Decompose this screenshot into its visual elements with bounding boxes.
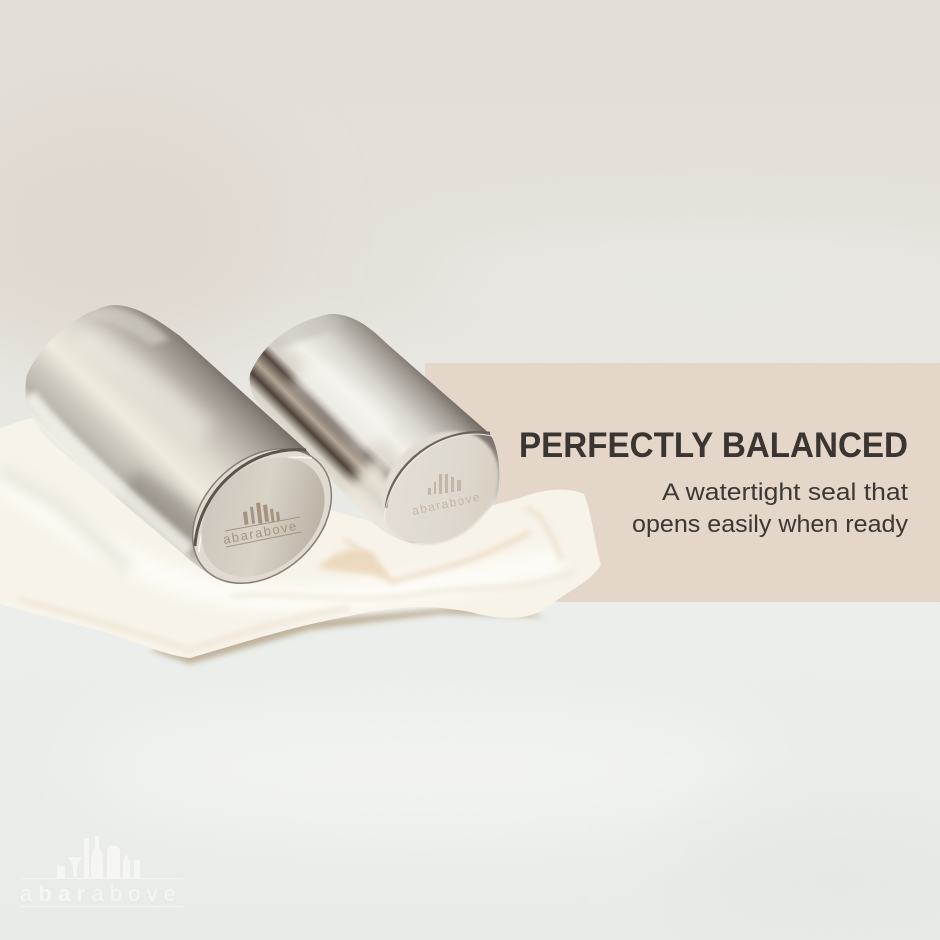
engraved logo: small cup: abarabove: [411, 490, 482, 518]
cloth shadow: [150, 604, 545, 664]
text block: description: opens easily when ready: [632, 511, 908, 538]
icon: small steel cup: [250, 314, 500, 545]
text block: description: A watertight seal that: [662, 479, 908, 506]
engraved logo: large cup: abarabove: [222, 518, 299, 547]
heading: PERFECTLY BALANCED: [519, 426, 908, 465]
icon: brand watermark logo: abarabove: [20, 881, 182, 906]
rim: large cup base: [166, 421, 358, 611]
engraved logo: small cup: [411, 474, 482, 518]
text block: description: [632, 479, 908, 538]
lid: large cup base: [178, 433, 348, 601]
engraved logo: large cup: [222, 503, 301, 547]
icon: brand watermark logo: [20, 836, 183, 907]
lid: small cup base: [359, 408, 521, 568]
cloth: white napkin under cups: [0, 418, 601, 658]
icon: large steel cup: [25, 305, 332, 584]
panel: beige text band: [425, 363, 940, 602]
